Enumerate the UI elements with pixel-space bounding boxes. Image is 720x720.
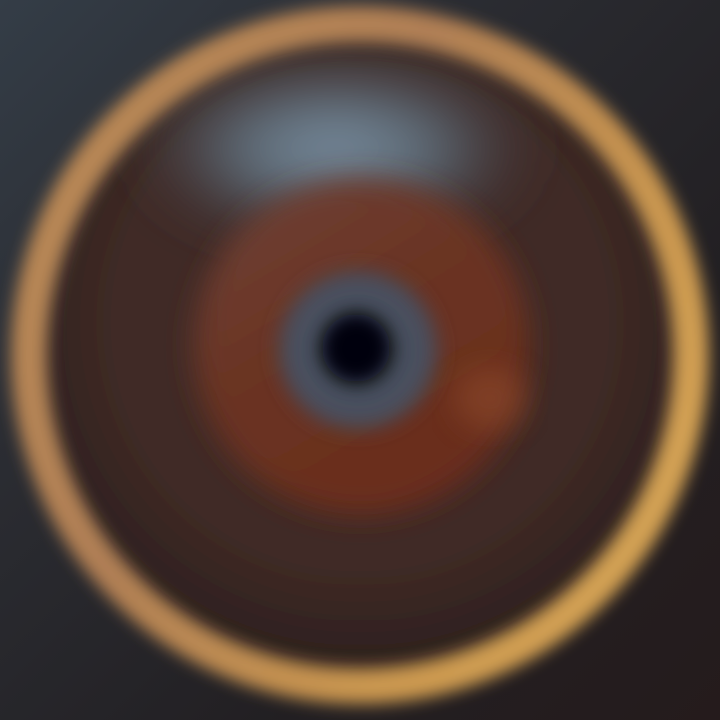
- blue-grey iris: [274, 266, 442, 434]
- warm highlight spot: [454, 366, 526, 430]
- black pupil: [322, 314, 390, 382]
- top blue glow: [130, 50, 540, 246]
- red-brown annulus: [194, 179, 530, 515]
